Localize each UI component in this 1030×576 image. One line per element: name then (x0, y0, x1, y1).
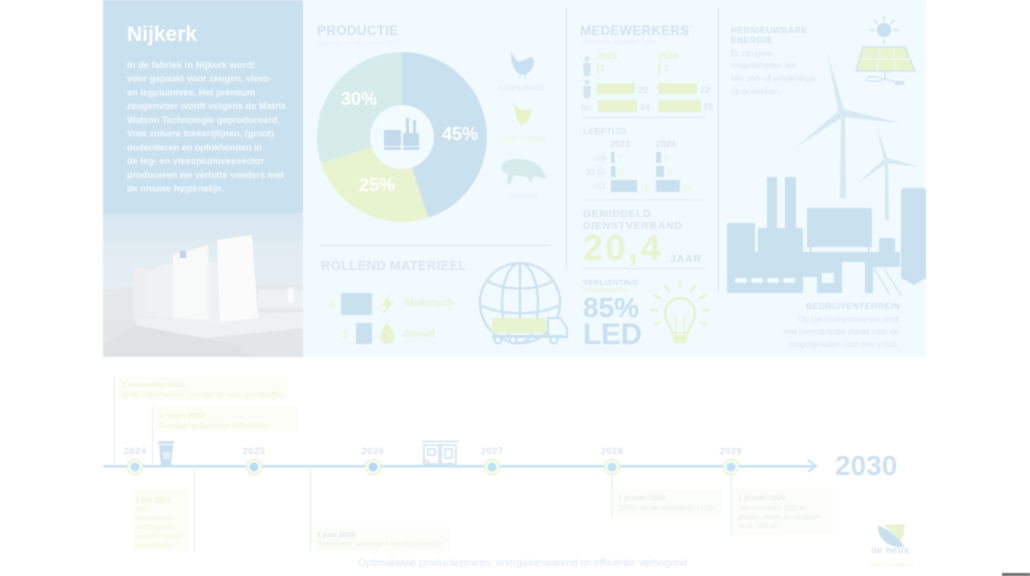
icon: factory (384, 118, 419, 150)
panel: hernieuwbare energie: ENERGIE (731, 35, 773, 45)
icon: vending truck (422, 442, 459, 467)
icon and label: hen (500, 52, 545, 92)
text: hernieuwbare energie: mogelijkheden om (731, 61, 796, 70)
text: hernieuwbare energie: op te wekken. (731, 87, 780, 96)
end year 2030: 2030 (835, 450, 897, 481)
value: 45%: 45% (442, 124, 478, 144)
intro text block: voor gepaakt voor zeugen, vlees- (127, 74, 272, 84)
icon: solar panel (856, 47, 915, 85)
text: bedrijventerrein (783, 315, 900, 349)
callout: 1 juli 2024: aan pelletlijn (135, 542, 172, 549)
intro text block: Voor zuivere fokkerijlijnen, (groot) (127, 128, 274, 138)
heading: hernieuwbare energie: HERNIEUWBARE (731, 25, 807, 35)
heading: medewerkers: MEDEWERKERS (580, 23, 689, 38)
callout: 1 januari 2029: Alle machines: LED en (738, 505, 807, 512)
chart: age bars: 16 (683, 183, 692, 192)
chart: gender bars: 25 (703, 102, 713, 112)
subtitle: productie: Geproduceerde tonnen 2024 (317, 40, 401, 47)
chart: gender bars: 2023 (597, 51, 617, 61)
heading: productie: PRODUCTIE (317, 23, 398, 38)
row: diesel: 2 (342, 330, 348, 341)
heading: gemiddeld dienstverband: GEMIDDELD (583, 208, 651, 220)
value: 25%: 25% (359, 175, 395, 195)
chart: age bars: 7 (664, 154, 669, 163)
logo: de heus: passion for progress (868, 562, 914, 568)
chart: age bars: 2024 (656, 139, 676, 149)
icon: large wind turbine (795, 52, 900, 198)
icon and label: pig: VARKENS (507, 194, 538, 201)
value: 20,4 jaar (583, 227, 702, 268)
year labels: 2028 (601, 446, 623, 457)
icon and label: hen: LOOPLIJNVEE (500, 85, 545, 92)
year labels (124, 446, 742, 457)
value: 30%: 30% (341, 89, 377, 109)
panel: verlichting: Productiegebouw (583, 288, 630, 294)
chart: age bars: 9 (668, 168, 673, 177)
text: bedrijventerrein: een inventarisatie plaats naar de (783, 327, 900, 336)
callout: 1 januari 2028 (612, 473, 722, 517)
callout: 1 januari 2028: 100% van de verlichting is LED (618, 505, 715, 512)
callout: 1 juli 2024: warmtepomp (134, 515, 173, 522)
chart: age bars: 2023 (610, 139, 630, 149)
panel: verlichting: 85% (583, 292, 639, 323)
row: elektrisch: Elektrisch (404, 297, 454, 309)
callout: 1 juli 2024 (133, 466, 195, 552)
intro text block: produceren we verhitte voeders met (127, 170, 284, 180)
chart: age bars (586, 139, 692, 192)
chart: gender bars: fte: (581, 103, 592, 112)
row: elektrisch (329, 293, 454, 316)
text: bedrijventerrein: Op het bedrijventerrein vindt (798, 315, 900, 324)
milestone nodes (128, 460, 738, 474)
value: 20,4 jaar: JAAR (670, 253, 702, 265)
subtitle: medewerkers: Definitieve aantallen 2024 (581, 39, 656, 46)
panel: medewerkers (580, 23, 713, 351)
year labels: 2026 (362, 446, 384, 457)
panel: rollend materieel (320, 244, 567, 344)
icon: globe with truck (480, 263, 567, 344)
callout: 1 september 2024: 1 september 2024 (122, 380, 186, 389)
panel: verlichting: LED (583, 318, 642, 351)
callout: 1 januari 2029: in ca. 185 t/u. (738, 523, 779, 530)
chart: gender bars: 24 (640, 102, 650, 112)
intro text block: zeugenvoer wordt volgens de Matrix (127, 101, 287, 111)
chart: age bars: 8 (619, 168, 624, 177)
icon and label: pig (502, 159, 546, 201)
callout: 1 september 2024: Einde suikertoevoer, overstap op vaste grondstoffen (122, 392, 283, 399)
panel: productie (317, 23, 546, 222)
callout: 1 maart 2024: Overstap op duurzame koffiebekers (159, 423, 270, 430)
chart: gender bars: 3 (664, 64, 669, 73)
icon: sun (870, 16, 898, 44)
callout: 1 maart 2024 (152, 406, 298, 466)
panel: verlichting: VERLICHTING (583, 278, 638, 287)
intro text block: In de fabriek in Nijkerk wordt (127, 60, 255, 70)
chart: gender bars: 3 (600, 64, 605, 73)
intro text block: de nieuwe hygiënelijn. (127, 184, 224, 194)
logo: de heus: de heus (871, 545, 910, 556)
heading: rollend materieel: ROLLEND MATERIEEL (321, 258, 467, 273)
callout: 1 juni 2025: Stoomketel vervangen met Economizer (317, 539, 443, 548)
year labels: 2029 (720, 446, 742, 457)
intro text block: en legpluimvee. Het premium (127, 88, 255, 98)
timeline axis with arrow (103, 460, 816, 472)
value: 20,4 jaar: 20,4 (583, 227, 663, 268)
chart: gender bars: 2024 (658, 51, 678, 61)
text: hernieuwbare energie (731, 49, 817, 96)
logo: de heus (868, 524, 914, 568)
chart: gender bars: 22 (638, 85, 648, 95)
row: diesel (342, 322, 435, 344)
callout: 1 januari 2029: 1 januari 2029 (738, 493, 786, 502)
callout: 1 juli 2024: voor hygiëne (135, 524, 173, 531)
year labels: 2025 (243, 446, 266, 457)
icon and label: chicken: LEGPLUIMVEE (499, 136, 546, 143)
text: hernieuwbare energie: Er zijn geen (731, 49, 773, 58)
row: elektrisch: 4 (329, 300, 335, 311)
callout: 1 juli 2024: Start (135, 506, 149, 513)
chart: age bars: 5 (617, 154, 622, 163)
year labels: 2027 (481, 446, 503, 457)
pie chart: production share (317, 52, 487, 222)
text: hernieuwbare energie: hier zon- of windenergie (731, 74, 817, 83)
chart: age bars: 18 (640, 183, 649, 192)
intro text block: de leg- en vleespluimveesector (127, 156, 264, 166)
panel: Nijkerk intro (103, 0, 303, 213)
heading: bedrijventerrein: BEDRIJVENTERREIN (806, 301, 900, 311)
text: bedrijventerrein: mogelijkheden voor een e-hub. (789, 340, 899, 349)
photo: Nijkerk factory (103, 213, 303, 357)
year labels: 2024 (124, 446, 147, 457)
intro text block: Watson Technologie geproduceerd. (127, 115, 280, 125)
callout: 1 juli 2024: 1 juli 2024 (135, 495, 172, 504)
callout: 1 maart 2024: 1 maart 2024 (159, 411, 205, 420)
icon: small wind turbine (858, 127, 920, 220)
chart: age bars: >51 (592, 182, 607, 191)
chart: age bars: 30-50 (586, 168, 607, 177)
footer statement: Optimalisatie productieproces: energiebesparend en efficiëntie verhogend (358, 557, 687, 569)
callout: 1 juli 2024: systeem, koppel (135, 533, 183, 540)
callout: 1 januari 2029: groene stroom en rendabel (738, 514, 820, 521)
panel: medewerkers: DIENSTVERBAND (583, 220, 683, 232)
callout: 1 juni 2025: 1 juni 2025 (317, 530, 355, 539)
heading: leeftijd: LEEFTIJD (583, 126, 626, 136)
chart: gender bars (581, 51, 713, 112)
heading: Nijkerk: Nijkerk (127, 23, 197, 46)
panel: hernieuwbare energie (727, 16, 926, 349)
illustration: factory site (727, 177, 926, 295)
icon and label: chicken (499, 102, 546, 143)
callout: 1 januari 2028: 1 januari 2028 (618, 493, 666, 502)
panel: verlichting (583, 278, 709, 351)
icon: coffee cup (158, 441, 174, 466)
intro text block: ouderdieren en opfokhennen in (127, 142, 262, 152)
callout: 1 juni 2025 (310, 466, 450, 552)
row: diesel: Diesel (404, 328, 435, 340)
intro text block (127, 60, 287, 194)
callout: 1 september 2024 (114, 376, 288, 466)
timeline (103, 376, 897, 569)
callout: 1 januari 2029 (730, 473, 833, 535)
icon: light bulb (651, 281, 709, 343)
chart: gender bars: 22 (700, 85, 710, 95)
chart: age bars: <28 (592, 154, 607, 163)
